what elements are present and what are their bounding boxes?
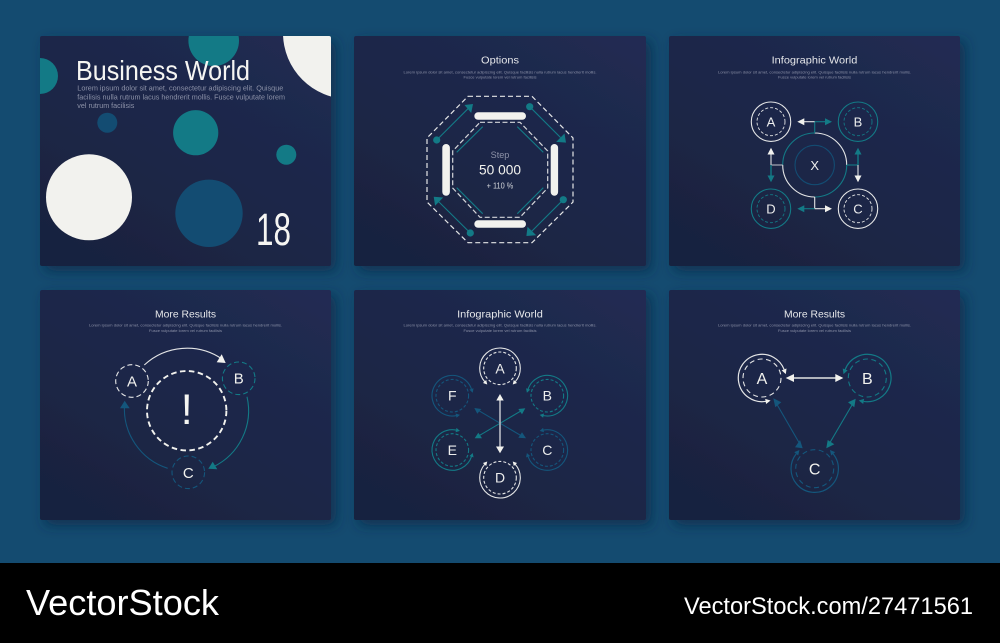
center stats: + 110 % [487,180,514,190]
hub diagram [751,102,878,228]
heading: Options [481,55,519,67]
connecting arrows [773,374,856,448]
six node diagram [427,340,573,506]
panel: More Results cycle [40,290,331,520]
node letters: B [543,388,552,404]
panel: Business World cover [40,36,340,274]
description: Lorem ipsum dolor sit amet, consectetur adipiscing elit. Quisque facilisis nulla rutrum lacus hendrerit mollis. [718,323,911,328]
node B [522,370,573,421]
footer url: VectorStock.com/27471561 [684,593,973,620]
cycle diagram [116,348,255,489]
node C [838,189,878,228]
description: Lorem ipsum dolor sit amet, consectetur adipiscing elit. Quisque facilisis nulla rutrum lacus hendrerit mollis. [404,70,596,75]
description: Fusce vulputate lorem vel rutrum facilisis [464,328,537,333]
footer bar [0,563,1000,643]
heading: More Results [155,308,216,320]
node D [471,449,529,506]
panel: Options [354,36,646,266]
node letters: D [495,470,505,486]
description [404,70,596,80]
cover description: Lorem ipsum dolor sit amet, consectetur adipiscing elit. Quisque [77,84,283,92]
center stats: 50 000 [479,162,521,178]
footer logo: VectorStock [26,582,220,623]
panel: Infographic World six nodes [354,290,646,520]
node letters: C [853,202,863,216]
description: Lorem ipsum dolor sit amet, consectetur adipiscing elit. Quisque facilisis nulla rutrum lacus hendrerit mollis. [89,323,282,328]
panel: Infographic World hub [669,36,960,266]
page number: 18 [256,204,291,255]
description [89,323,282,333]
node letters: A [495,360,505,376]
node letters: A [767,114,776,130]
node letters: F [448,388,457,404]
node letters: C [542,442,552,458]
exclamation mark: ! [181,386,193,434]
description [404,323,596,333]
cover description [77,84,285,110]
node B [837,348,898,408]
node letters: C [183,465,194,482]
node letters: X [810,158,819,173]
node letters: C [809,462,820,478]
node circles [116,365,148,397]
decorative circles [40,36,331,247]
heading: Infographic World [457,308,543,320]
cover description: facilisis nulla rutrum lacus hendrerit mollis. Fusce vulputate lorem [77,92,285,101]
description: Lorem ipsum dolor sit amet, consectetur adipiscing elit. Quisque facilisis nulla rutrum lacus hendrerit mollis. [718,70,911,75]
center stats [479,150,521,190]
node letters: A [127,374,137,390]
node E [427,424,478,476]
node letters: A [757,371,768,388]
description [718,323,911,333]
description: Fusce vulputate lorem vel rutrum facilisis [778,328,851,333]
heading: Infographic World [772,55,858,67]
central dashed circle [147,371,226,450]
node A [471,340,529,397]
node X [783,133,847,197]
center stats: Step [491,150,509,161]
connector arrows [771,122,858,209]
triangle diagram [735,348,898,502]
node letters [127,371,244,482]
node letters [448,360,552,486]
teal arrows [437,107,563,233]
node F [428,372,476,420]
cover title: Business World [76,55,250,86]
node C [781,435,848,502]
node letters: E [448,442,457,458]
node letters: B [862,371,873,388]
heading: More Results [784,308,845,320]
description [718,70,911,80]
node letters: B [854,114,862,130]
node B [838,102,878,141]
central arrows [474,394,526,453]
cover description: vel rutrum facilisis [77,101,135,110]
node letters [757,371,873,478]
panel: More Results triangle [669,290,960,520]
white bars [442,112,558,228]
octagon diagram [427,96,573,243]
node A [751,102,791,141]
node A [735,351,789,405]
node letters: D [766,202,776,216]
description: Fusce vulputate lorem vel rutrum facilisis [778,75,851,80]
description: Fusce vulputate lorem vel rutrum facilisis [464,75,537,80]
description: Lorem ipsum dolor sit amet, consectetur adipiscing elit. Quisque facilisis nulla rutrum lacus hendrerit mollis. [404,323,596,328]
node letters: B [234,371,244,388]
node letters [766,114,863,216]
cycle arrows [144,348,222,365]
description: Fusce vulputate lorem vel rutrum facilisis [149,328,222,333]
node C [523,426,571,474]
node D [751,189,791,228]
